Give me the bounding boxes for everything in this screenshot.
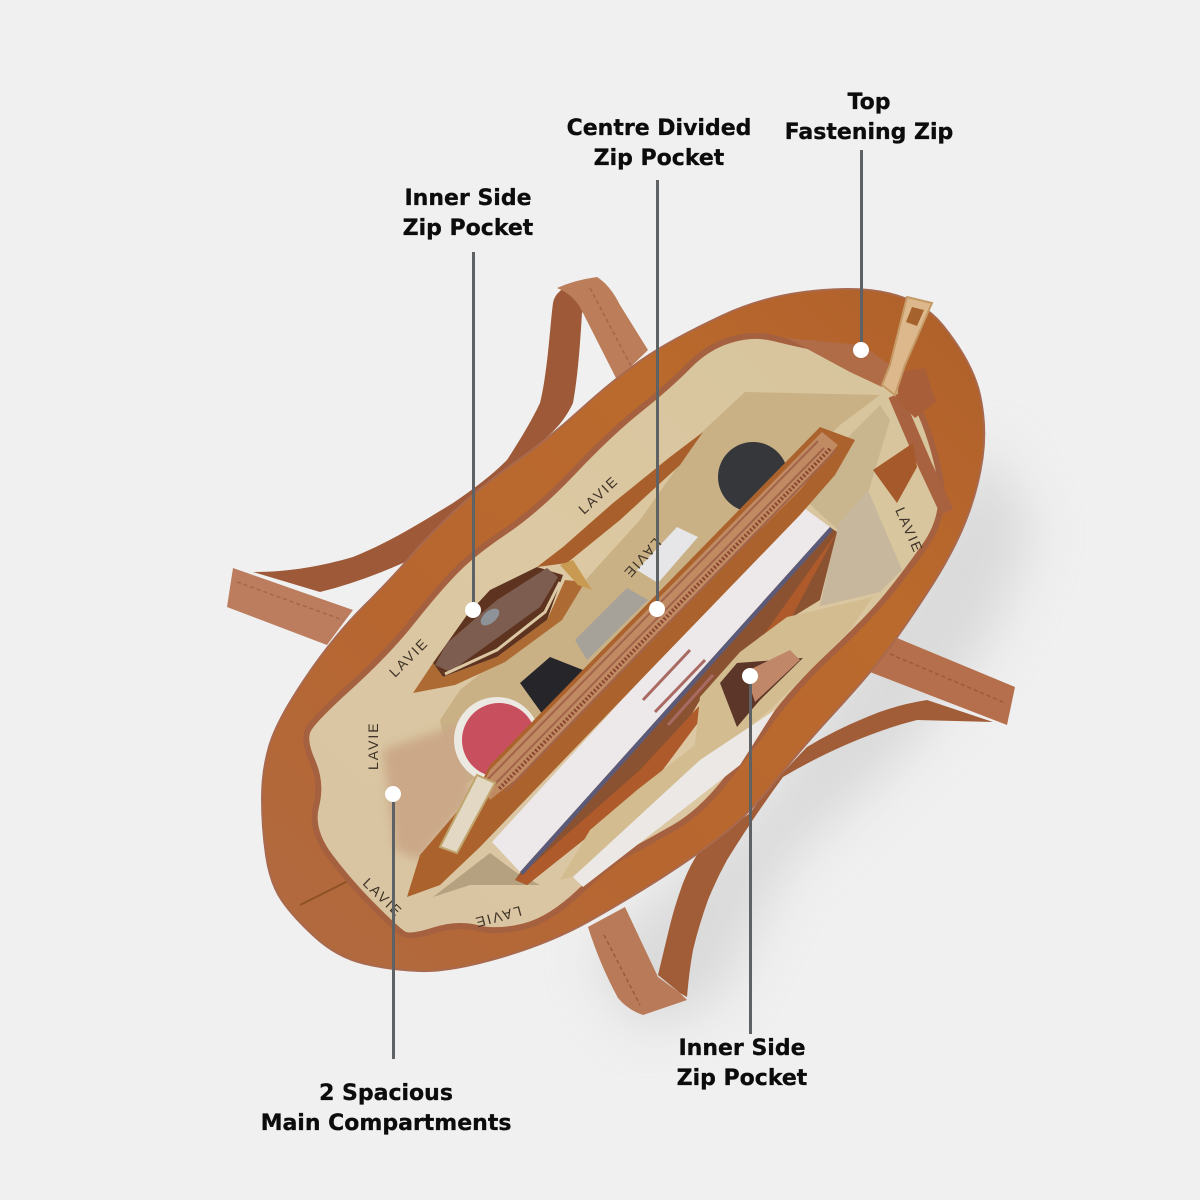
book xyxy=(492,500,837,885)
charger xyxy=(637,527,698,583)
lining brand marks xyxy=(360,472,927,931)
zip tab xyxy=(873,443,917,503)
lining xyxy=(306,336,942,935)
round dark object xyxy=(718,442,788,512)
right zip band xyxy=(895,395,947,512)
lining brand marks: LAVIE xyxy=(360,875,406,920)
centre zip pocket xyxy=(407,427,855,897)
lining brand marks: LAVIE xyxy=(386,634,432,680)
lower floor shadow xyxy=(433,853,540,897)
callout: inner side zip pocket lower: Inner Side xyxy=(678,1036,806,1061)
callout: top fastening zip xyxy=(785,90,953,358)
bag bottom crease xyxy=(300,880,350,905)
left inner pocket xyxy=(413,432,703,693)
lining brand marks: LAVIE xyxy=(472,903,523,931)
lining brand marks: LAVIE xyxy=(620,535,665,582)
callout: main compartments xyxy=(261,786,511,1136)
callout: main compartments: 2 Spacious xyxy=(319,1081,453,1106)
bag shadow xyxy=(590,440,1035,1030)
lining brand marks: LAVIE xyxy=(892,505,927,556)
callout: centre divided zip pocket xyxy=(567,116,751,617)
back handle xyxy=(227,277,648,645)
callout: inner side zip pocket lower xyxy=(677,668,808,1091)
callout: main compartments: Main Compartments xyxy=(261,1111,511,1136)
callout: top fastening zip: Top xyxy=(848,90,890,115)
black box xyxy=(520,657,583,715)
lining brand marks: LAVIE xyxy=(365,721,381,770)
phone camera xyxy=(478,605,502,629)
right chamber xyxy=(800,405,902,606)
zip knot xyxy=(897,368,936,418)
pink tin xyxy=(454,697,540,783)
notebook xyxy=(573,710,775,887)
phone xyxy=(435,568,558,672)
callout: centre divided zip pocket: Zip Pocket xyxy=(594,146,725,171)
left chamber pink floor xyxy=(383,720,470,860)
callout: inner side zip pocket upper: Inner Side xyxy=(404,186,532,211)
pocket zip pull xyxy=(560,560,592,590)
spectacles xyxy=(720,658,803,727)
callout: inner side zip pocket lower: Zip Pocket xyxy=(677,1066,808,1091)
top zip pull xyxy=(882,297,932,395)
front inner pocket xyxy=(560,597,873,887)
gadget case xyxy=(575,588,648,660)
upper chamber floor xyxy=(440,392,880,790)
centre pocket zip pull xyxy=(440,775,495,853)
top zip band xyxy=(787,338,890,387)
callout: inner side zip pocket upper: Zip Pocket xyxy=(403,216,534,241)
phone lip xyxy=(413,580,585,693)
callout: inner side zip pocket upper xyxy=(403,186,534,618)
lining brand marks: LAVIE xyxy=(575,472,622,517)
bag body xyxy=(262,289,984,971)
front handle xyxy=(588,638,1015,1015)
callout: top fastening zip: Fastening Zip xyxy=(785,120,953,145)
callout: centre divided zip pocket: Centre Divided xyxy=(567,116,751,141)
bag illustration xyxy=(227,277,1035,1030)
